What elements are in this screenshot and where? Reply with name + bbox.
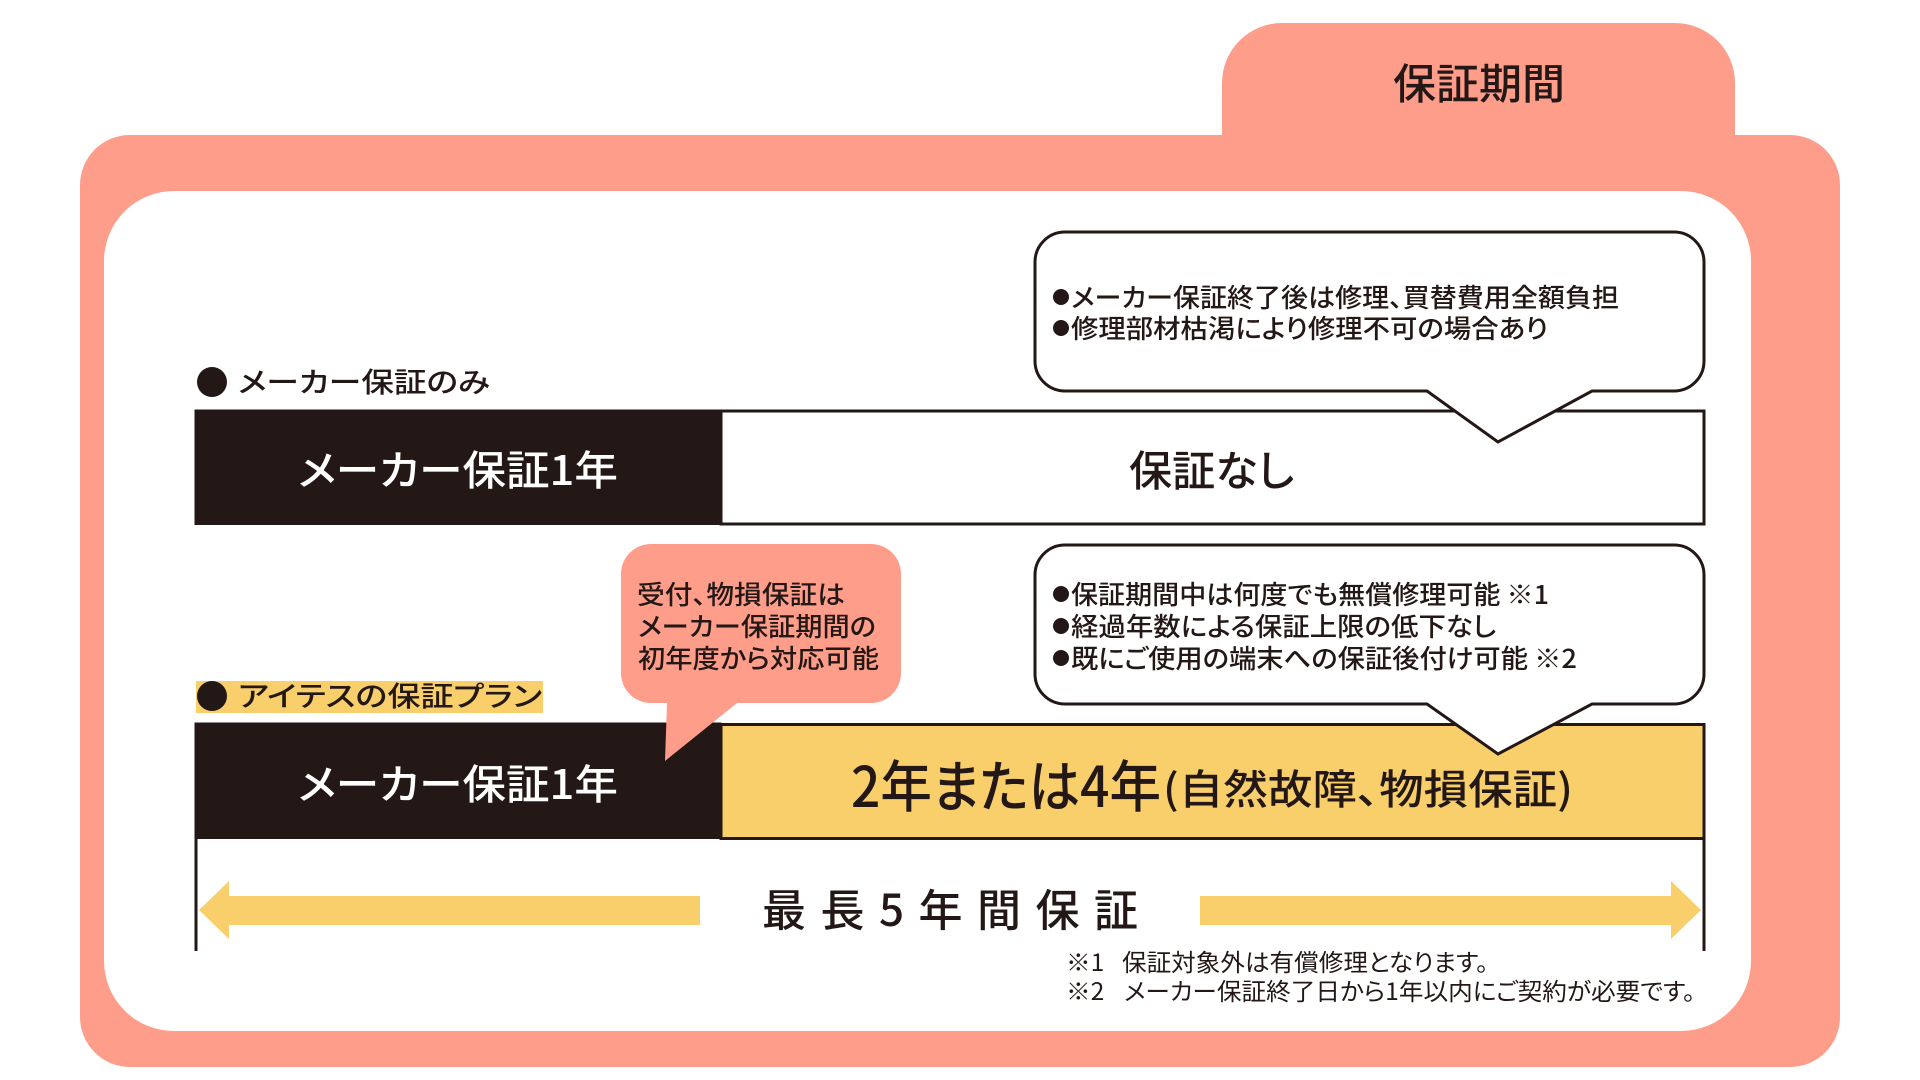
footnotes: ※2: [1066, 972, 1103, 1007]
label: 2 or 4 years: [851, 743, 1573, 824]
tag: Aitesu warranty plan: アイテスの保証プラン: [238, 675, 543, 715]
label: no warranty: 保証なし: [1129, 438, 1294, 499]
callout text: [637, 575, 879, 676]
bar: no warranty segment: [721, 411, 1704, 524]
callout text: メーカー保証終了後は修理、買替費用全額負担: [1071, 278, 1619, 315]
callout text: 初年度から対応可能: [638, 639, 879, 676]
callout text: 受付、物損保証は: [637, 575, 845, 612]
callout text: 経過年数による保証上限の低下なし: [1071, 607, 1496, 644]
label: maker warranty 1 year: メーカー保証1年: [298, 751, 618, 811]
title: 保証期間: [1393, 51, 1565, 112]
label: 2 or 4 years: (自然故障、物損保証): [1163, 756, 1573, 816]
callout: accident coverage: [621, 544, 901, 761]
bar: maker warranty segment: [194, 410, 722, 525]
callout text: [1053, 278, 1619, 346]
callout text: [1053, 575, 1577, 676]
label: maker warranty 1 year: メーカー保証1年: [298, 437, 618, 497]
arrow: left: [199, 881, 700, 939]
bar: plan maker warranty segment: [194, 722, 722, 839]
tab: warranty period: [1222, 23, 1735, 140]
row label: メーカー保証のみ: [238, 361, 490, 401]
footnotes: [1066, 943, 1695, 1007]
callout text: 修理部材枯渇により修理不可の場合あり: [1071, 309, 1548, 346]
panel: outer frame: [80, 135, 1840, 1067]
callout: after maker warranty: [1035, 232, 1704, 442]
row: maker warranty only: [194, 361, 1704, 525]
callout: plan benefits: [1035, 545, 1704, 754]
bar: plan yellow segment: [721, 724, 1704, 838]
callout text: メーカー保証期間の: [638, 607, 876, 644]
panel: inner white area: [104, 191, 1751, 1031]
callout text: 保証期間中は何度でも無償修理可能 ※1: [1071, 575, 1549, 612]
callout text: 既にご使用の端末への保証後付け可能 ※2: [1071, 639, 1577, 676]
label: 2 or 4 years: 2年または4年: [851, 743, 1161, 824]
footnotes: メーカー保証終了日から1年以内にご契約が必要です。: [1124, 972, 1695, 1007]
span brackets: [196, 839, 1704, 951]
footnotes: ※1: [1066, 943, 1103, 978]
footnotes: 保証対象外は有償修理となります。: [1122, 943, 1488, 978]
arrow: right: [1200, 881, 1701, 939]
label: up to 5 years warranty: 最長5年間保証: [762, 875, 1138, 939]
